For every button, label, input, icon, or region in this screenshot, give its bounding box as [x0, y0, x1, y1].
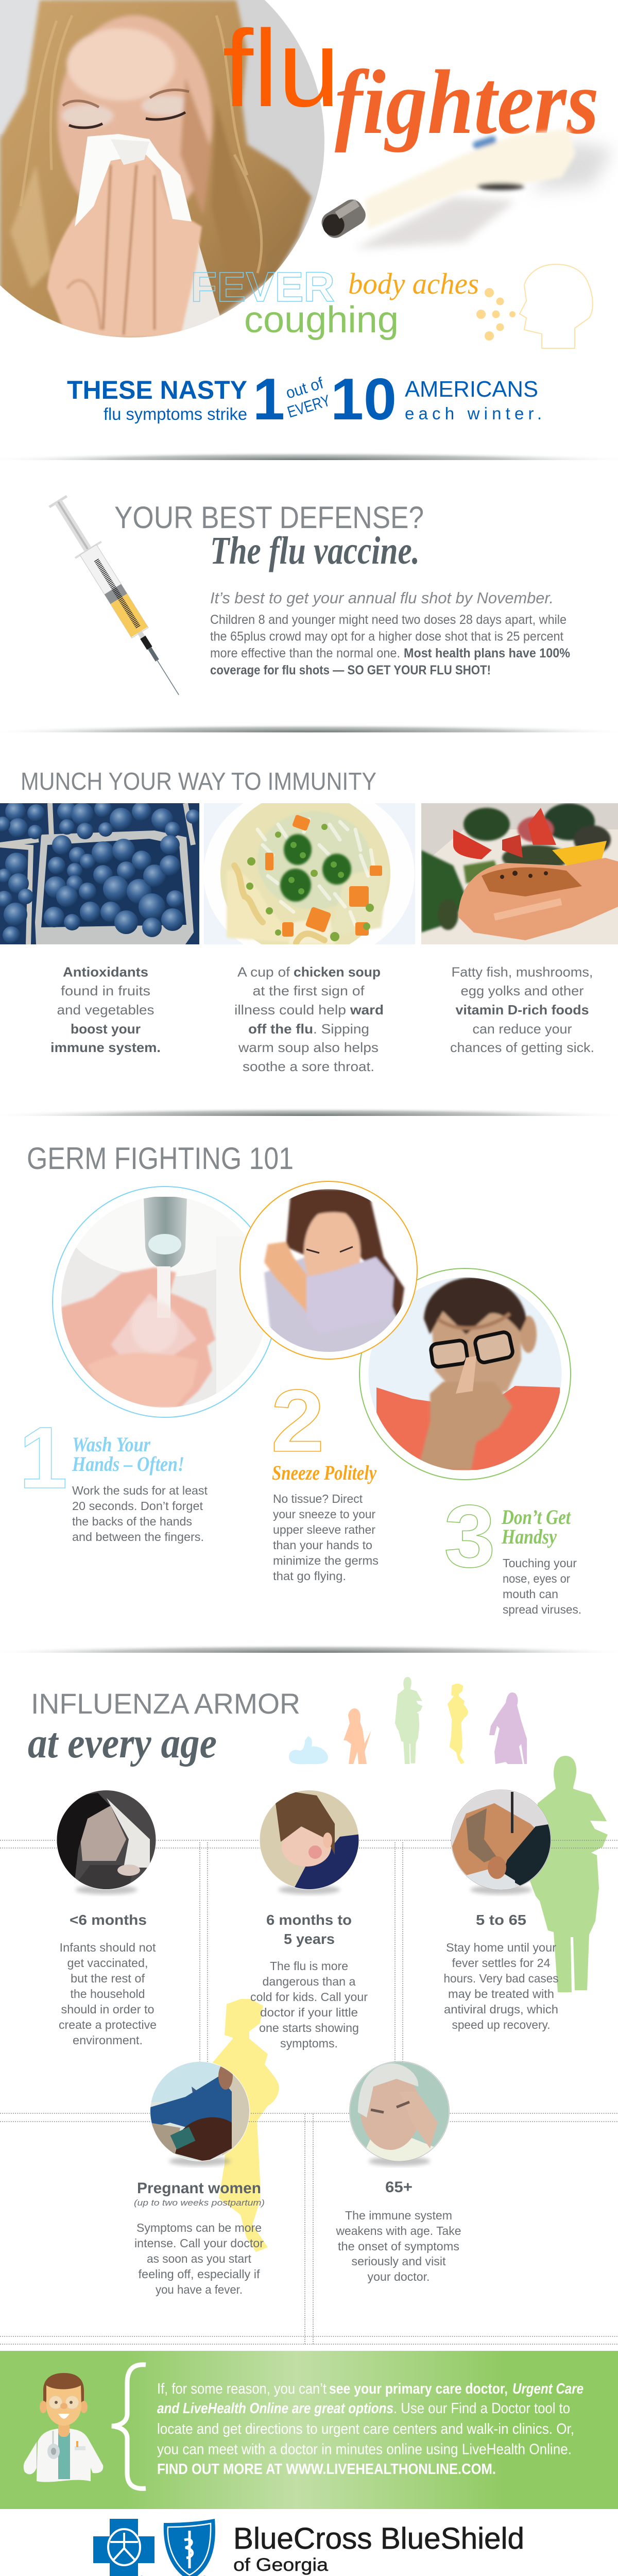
text block: flu shot advice: the 65plus crowd may opt for a higher dose shot that is 25 percent [210, 630, 563, 644]
column: pregnant women: Pregnant women [137, 2180, 261, 2197]
icon: coughing head with droplets [476, 264, 593, 348]
stat banner: 1 out of every 10 Americans: THESE NASTY [67, 376, 247, 404]
photo circle: sleeping infant [57, 1790, 157, 1894]
photo: salmon and salad [421, 803, 618, 944]
step 2: sneeze politely: minimize the germs [273, 1554, 379, 1567]
column: 5 to 65: fever settles for 24 [452, 1956, 551, 1970]
column: under 6 months: create a protective [59, 2018, 157, 2031]
hero photo: woman sneezing into a tissue [0, 0, 330, 340]
callout text: and LiveHealth Online are great options [157, 2400, 393, 2417]
column: pregnant women: feeling off, especially if [138, 2267, 260, 2281]
symptom: coughing: coughing [244, 299, 399, 341]
column: 5 to 65: speed up recovery. [452, 2018, 550, 2031]
divider [0, 1108, 618, 1125]
column: pregnant women: as soon as you start [147, 2252, 252, 2265]
heading: influenza armor: INFLUENZA ARMOR [31, 1687, 300, 1720]
text: vitamin D foods: chances of getting sick. [450, 1040, 594, 1055]
text: antioxidants: Antioxidants [63, 964, 148, 980]
heading: germ fighting 101: GERM FIGHTING 101 [27, 1141, 294, 1176]
step 1: wash your hands: 20 seconds. Don’t forget [72, 1499, 203, 1513]
step 2: sneeze politely: that go flying. [273, 1569, 346, 1583]
column: under 6 months: should in order to [61, 2003, 154, 2016]
column: 6 months to 5 years: dangerous than a [263, 1975, 356, 1988]
column: 65 plus: The immune system [345, 2209, 452, 2222]
column: pregnant women: (up to two weeks postpartum) [134, 2198, 265, 2208]
step 2: sneeze politely: upper sleeve rather [273, 1523, 375, 1536]
step 3: don't get handsy: mouth can [503, 1587, 558, 1601]
photo circle: don't touch your face [359, 1268, 572, 1480]
column: 6 months to 5 years: 5 years [284, 1931, 335, 1947]
step 2: sneeze politely: 2 [271, 1371, 324, 1470]
text block: flu shot advice: more effective than the normal one. [210, 646, 400, 660]
column: 6 months to 5 years: symptoms. [280, 2037, 338, 2050]
heading: munch your way to immunity: MUNCH YOUR WAY TO IMMUNITY [21, 768, 376, 795]
symptom: FEVER: FEVER [191, 264, 335, 311]
step 3: don't get handsy [444, 1487, 581, 1616]
text: chicken soup: A cup of [237, 964, 290, 980]
text: vitamin D foods [450, 964, 594, 1055]
text: chicken soup: . Sipping [313, 1021, 369, 1037]
column: 65 plus: your doctor. [368, 2270, 430, 2283]
callout text: FIND OUT MORE AT WWW.LIVEHEALTHONLINE.COM. [157, 2461, 496, 2478]
title: fighters: fighters [335, 51, 599, 153]
stat banner: 1 out of every 10 Americans [67, 367, 542, 432]
text: chicken soup: chicken soup [294, 964, 381, 980]
column: 65 plus: the onset of symptoms [338, 2240, 459, 2253]
step 3: don't get handsy: Handsy [501, 1525, 557, 1548]
divider [0, 724, 618, 741]
photo circle: sick child [258, 1790, 360, 1894]
column: under 6 months: environment. [73, 2033, 143, 2047]
text: vitamin D foods: egg yolks and other [460, 983, 584, 998]
step 1: wash your hands: Wash Your [72, 1433, 150, 1456]
step 1: wash your hands: Hands – Often! [72, 1452, 184, 1476]
icon: blue shield [164, 2519, 215, 2576]
column: 5 to 65: hours. Very bad cases [444, 1972, 558, 1985]
photo circle: older man [349, 2061, 450, 2166]
column: under 6 months: the household [70, 1987, 145, 2001]
callout text [157, 2381, 583, 2478]
text: chicken soup: at the first sign of [252, 983, 365, 998]
logo: BlueCross BlueShield of Georgia: of Georgia [233, 2555, 329, 2575]
text block: flu shot advice [210, 589, 570, 677]
column: 65 plus: 65+ [385, 2179, 413, 2196]
text: chicken soup: illness could help [234, 1002, 346, 1018]
icon: doctor [24, 2373, 103, 2482]
step 2: sneeze politely [271, 1371, 379, 1583]
stat banner: 1 out of every 10 Americans: 10 [331, 367, 397, 432]
photo circle: woman sneezing into sleeve [240, 1181, 417, 1359]
callout text: If, for some reason, you can’t [157, 2381, 327, 2397]
text: vitamin D foods: can reduce your [473, 1021, 572, 1037]
logo: BlueCross BlueShield of Georgia [93, 2519, 524, 2576]
step 1: wash your hands [19, 1409, 208, 1544]
stat banner: 1 out of every 10 Americans: AMERICANS [405, 377, 538, 402]
logo: BlueCross BlueShield of Georgia: BlueCross BlueShield [233, 2522, 524, 2555]
text: antioxidants: boost your [71, 1021, 141, 1037]
photo circle: adult resting [451, 1790, 552, 1894]
big silhouette: adult [530, 1756, 608, 1992]
heading: your best defense: YOUR BEST DEFENSE? [114, 500, 424, 535]
step 3: don't get handsy: nose, eyes or [503, 1572, 570, 1585]
column: pregnant women: Symptoms can be more [136, 2221, 262, 2234]
silhouettes: age groups [289, 1677, 527, 1764]
photo circle: hand washing [53, 1176, 277, 1417]
heading: at every age: at every age [28, 1719, 217, 1767]
icon: blue cross [93, 2519, 154, 2576]
callout text: Urgent Care [512, 2381, 583, 2397]
column: 65 plus: weakens with age. Take [336, 2224, 461, 2238]
photo circle: pregnant woman [149, 2061, 250, 2166]
column: 5 to 65: 5 to 65 [476, 1912, 526, 1928]
column: under 6 months: <6 months [70, 1912, 147, 1928]
text block: flu shot advice: It’s best to get your annual flu shot by November. [210, 589, 554, 607]
text: chicken soup: soothe a sore throat. [243, 1059, 374, 1074]
column: under 6 months: Infants should not [60, 1941, 156, 1954]
column: under 6 months [59, 1912, 157, 2047]
symptom: body aches: body aches [348, 267, 479, 300]
text: antioxidants: and vegetables [57, 1002, 154, 1018]
column: 6 months to 5 years [250, 1912, 368, 2050]
photo: chicken soup [204, 803, 415, 944]
title: flu: flu [222, 7, 340, 129]
callout text: . Use our Find a Doctor tool to [393, 2400, 570, 2417]
step 2: sneeze politely: your sneeze to your [273, 1507, 375, 1521]
stat banner: 1 out of every 10 Americans: each winter. [405, 404, 542, 423]
text: vitamin D foods: vitamin D-rich foods [455, 1002, 589, 1018]
column: 6 months to 5 years: The flu is more [270, 1959, 348, 1973]
column: 5 to 65: antiviral drugs, which [444, 2003, 558, 2016]
text: antioxidants: found in fruits [61, 983, 150, 998]
photo: blueberries [0, 800, 200, 944]
divider [0, 452, 618, 469]
text: chicken soup: off the flu [248, 1021, 313, 1037]
column: pregnant women: you have a fever. [156, 2283, 243, 2296]
step 3: don't get handsy: Don’t Get [501, 1505, 572, 1529]
big silhouette: pregnant woman [213, 1999, 279, 2252]
column: pregnant women [134, 2180, 265, 2296]
column: 6 months to 5 years: 6 months to [266, 1912, 352, 1928]
column: 6 months to 5 years: doctor if your little [260, 2006, 358, 2019]
text block: flu shot advice: Most health plans have 100% [404, 646, 570, 660]
column: 6 months to 5 years: one starts showing [259, 2021, 359, 2035]
column: under 6 months: but the rest of [71, 1972, 145, 1985]
column: pregnant women: intense. Call your doctor [134, 2236, 264, 2250]
step 3: don't get handsy: spread viruses. [503, 1603, 581, 1616]
illustration: syringe [44, 493, 192, 703]
step 1: wash your hands: Work the suds for at least [72, 1484, 208, 1497]
text: chicken soup [234, 964, 384, 1074]
stat banner: 1 out of every 10 Americans: EVERY [285, 391, 332, 421]
divider [0, 1645, 618, 1662]
step 2: sneeze politely: than your hands to [273, 1538, 372, 1552]
step 1: wash your hands: the backs of the hands [72, 1515, 192, 1528]
callout text: see your primary care doctor, [329, 2381, 508, 2397]
column: 5 to 65: Stay home until your [446, 1941, 556, 1954]
callout text: locate and get directions to urgent care centers and walk-in clinics. Or, [157, 2421, 574, 2437]
step 1: wash your hands: 1 [19, 1409, 67, 1507]
thermometer photo [317, 129, 613, 249]
text: antioxidants [50, 964, 161, 1055]
dotted grid lines [0, 1840, 618, 2345]
text block: flu shot advice: Children 8 and younger might need two doses 28 days apart, while [210, 613, 566, 627]
decorative brace [112, 2365, 146, 2488]
text block: flu shot advice: coverage for flu shots — SO GET YOUR FLU SHOT! [210, 663, 491, 677]
column: under 6 months: get vaccinated, [67, 1956, 148, 1970]
text: vitamin D foods: Fatty fish, mushrooms, [451, 964, 593, 980]
column: 5 to 65 [444, 1912, 558, 2031]
step 2: sneeze politely: Sneeze Politely [272, 1461, 376, 1484]
stat banner: 1 out of every 10 Americans: out of [284, 374, 325, 402]
step 2: sneeze politely: No tissue? Direct [273, 1492, 363, 1505]
step 1: wash your hands: and between the fingers. [72, 1530, 204, 1544]
text: antioxidants: immune system. [50, 1040, 161, 1055]
text: chicken soup: ward [350, 1002, 384, 1018]
text: chicken soup: warm soup also helps [238, 1040, 379, 1055]
column: 6 months to 5 years: cold for kids. Call your [250, 1990, 368, 2004]
panel: see a doctor [0, 2351, 618, 2509]
step 3: don't get handsy: Touching your [503, 1556, 577, 1570]
stat banner: 1 out of every 10 Americans: flu symptoms strike [104, 404, 247, 423]
callout text: you can meet with a doctor in minutes online using LiveHealth Online. [157, 2441, 572, 2458]
heading: the flu vaccine: The flu vaccine. [210, 529, 420, 572]
column: 65 plus [336, 2179, 461, 2283]
column: 5 to 65: may be treated with [448, 1987, 554, 2001]
column: 65 plus: seriously and visit [351, 2255, 446, 2268]
step 3: don't get handsy: 3 [444, 1487, 495, 1586]
stat banner: 1 out of every 10 Americans: 1 [253, 367, 285, 432]
